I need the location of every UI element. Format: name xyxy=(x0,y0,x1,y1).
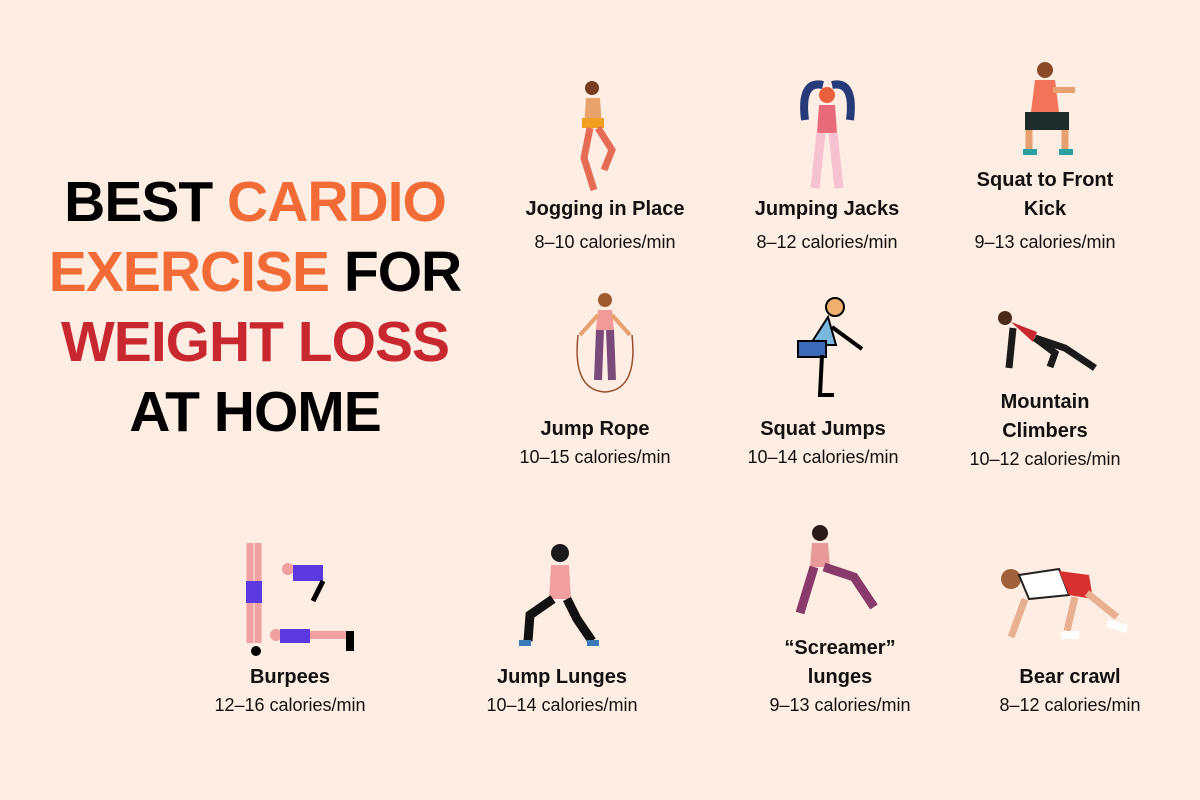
title: BEST CARDIO xyxy=(64,170,446,234)
item: Jump Rope xyxy=(519,418,671,467)
icon: jogging figure xyxy=(580,81,616,191)
icon: jump lunges figure xyxy=(519,544,599,646)
item: Jogging in Place xyxy=(526,198,684,252)
item: Squat to Front Kick xyxy=(974,169,1116,252)
icon: screamer lunges figure xyxy=(796,525,878,614)
item: Jumping Jacks xyxy=(755,198,899,252)
title: WEIGHT LOSS xyxy=(61,310,449,374)
item: Jump Lunges: Jump Lunges xyxy=(497,666,627,688)
item: Bear crawl: 8–12 calories/min xyxy=(999,695,1141,715)
icon: squat jumps figure xyxy=(797,297,864,397)
item: Squat Jumps xyxy=(747,418,899,467)
item: Mountain Climbers xyxy=(969,391,1121,469)
title xyxy=(49,170,461,444)
item: Mountain Climbers: 10–12 calories/min xyxy=(969,449,1121,469)
item: Jumping Jacks: 8–12 calories/min xyxy=(756,232,898,252)
icon: squat kick figure xyxy=(1023,62,1075,155)
item: Bear crawl: Bear crawl xyxy=(1019,666,1121,688)
icon: jumping jacks figure xyxy=(800,80,855,188)
item: Jumping Jacks: Jumping Jacks xyxy=(755,198,899,220)
item: Screamer lunges: 9–13 calories/min xyxy=(769,695,911,715)
title: EXERCISE FOR xyxy=(49,240,461,304)
item: Jogging in Place: Jogging in Place xyxy=(526,198,684,220)
item: Jump Lunges xyxy=(486,666,638,715)
icon: burpees figures xyxy=(246,543,354,656)
item: Burpees: 12–16 calories/min xyxy=(214,695,366,715)
icon: mountain climbers figure xyxy=(998,311,1097,371)
item: Jogging in Place: 8–10 calories/min xyxy=(534,232,676,252)
item: Squat to Front Kick: 9–13 calories/min xyxy=(974,232,1116,252)
item: Burpees xyxy=(214,666,366,715)
item: Screamer lunges: lunges xyxy=(808,666,872,688)
item: Jump Rope: Jump Rope xyxy=(541,418,649,440)
item: Screamer lunges xyxy=(769,637,911,715)
item: Squat to Front Kick: Kick xyxy=(1024,198,1066,220)
item: Screamer lunges: “Screamer” xyxy=(784,637,896,659)
item: Squat to Front Kick: Squat to Front xyxy=(977,169,1113,191)
item: Bear crawl xyxy=(999,666,1141,715)
title: AT HOME xyxy=(129,380,381,444)
item: Jump Lunges: 10–14 calories/min xyxy=(486,695,638,715)
item: Squat Jumps: Squat Jumps xyxy=(760,418,886,440)
icon: jump rope figure xyxy=(576,293,634,393)
item: Mountain Climbers: Climbers xyxy=(1002,420,1088,442)
icon: bear crawl figure xyxy=(1001,568,1128,639)
item: Burpees: Burpees xyxy=(250,666,330,688)
item: Mountain Climbers: Mountain xyxy=(1001,391,1089,413)
item: Squat Jumps: 10–14 calories/min xyxy=(747,447,899,467)
item: Jump Rope: 10–15 calories/min xyxy=(519,447,671,467)
